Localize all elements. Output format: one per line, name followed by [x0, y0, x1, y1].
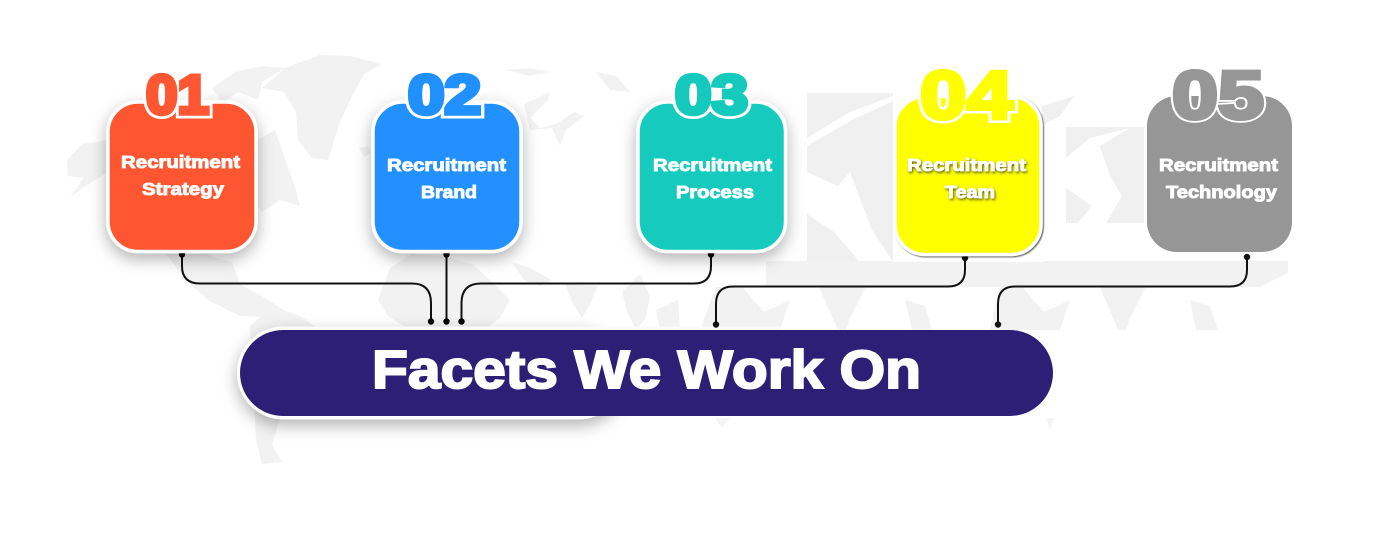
title: Facets We Work On: [372, 340, 921, 400]
map strip: Africa and Asia shapes: [700, 287, 1218, 330]
connector: card 05 to banner: [995, 254, 1250, 328]
map: eastern Canada: [257, 130, 300, 212]
map patch: centre-right: [807, 93, 1074, 273]
card 05 box: [1147, 96, 1292, 252]
map: India: [565, 284, 598, 318]
number 04 fill: 04: [920, 58, 1013, 134]
label line: Team: Team: [945, 182, 995, 202]
map: Arctic Russia fragments: [506, 68, 630, 92]
label line: Brand: Brand: [421, 182, 477, 202]
number 04: 04: [920, 58, 1013, 134]
panel: card 02 Recruitment Brand: [373, 64, 521, 252]
number 03: 03: [675, 64, 748, 126]
card 02 box: [373, 102, 521, 252]
number 05 fill: 05: [1172, 58, 1264, 134]
banner backing with shadow: [237, 326, 625, 420]
connector: card 01 to banner: [179, 251, 434, 325]
number 01 fill: 01: [146, 64, 209, 126]
panel: title banner: [240, 330, 1053, 416]
number 03 fill: 03: [675, 64, 748, 126]
card 04 box: [895, 96, 1041, 254]
number 05: 05: [1172, 58, 1264, 134]
panel: card 05 Recruitment Technology: [1147, 58, 1292, 252]
map strip: lower right: [700, 261, 1288, 330]
map: Alaska: [67, 140, 108, 197]
label line: Process: Process: [676, 182, 754, 202]
connector: card 04 to banner: [713, 255, 968, 328]
number 01: 01: [146, 64, 209, 126]
map: South East Asia: [622, 274, 680, 330]
map: Arctic islands: [212, 66, 285, 103]
panel: card 03 Recruitment Process: [638, 64, 786, 252]
label line: Technology: Technology: [1166, 182, 1277, 202]
number 02 fill: 02: [408, 64, 481, 126]
banner top highlight: [280, 326, 780, 332]
label line: Recruitment: Recruitment: [907, 155, 1026, 175]
map patch white cut: [807, 96, 893, 273]
map fragments below banner: [715, 418, 1054, 430]
card 01 box: [108, 102, 256, 252]
connector: card 03 to banner: [458, 251, 714, 325]
number 02: 02: [408, 64, 481, 126]
banner pill: [240, 330, 1053, 416]
map: Arabia: [512, 262, 552, 286]
panel: card 04 Recruitment Team: [895, 58, 1041, 254]
label line: Strategy: Strategy: [142, 179, 224, 199]
map: Greenland: [262, 55, 382, 160]
map: Iceland: [359, 146, 371, 157]
map: Central America: [166, 254, 296, 318]
card 03 box: [638, 102, 786, 252]
label line: Recruitment: Recruitment: [387, 155, 506, 175]
map: South America: [250, 306, 320, 464]
label line: Recruitment: Recruitment: [121, 152, 240, 172]
map: Scandinavia: [524, 92, 584, 146]
panel: card 01 Recruitment Strategy: [108, 64, 256, 252]
connector: card 02 to banner: [443, 251, 450, 325]
background world map: [67, 55, 680, 464]
map: Africa: [378, 254, 510, 330]
map patch: near card 05: [1066, 127, 1144, 223]
label line: Recruitment: Recruitment: [653, 155, 772, 175]
label line: Recruitment: Recruitment: [1159, 155, 1278, 175]
